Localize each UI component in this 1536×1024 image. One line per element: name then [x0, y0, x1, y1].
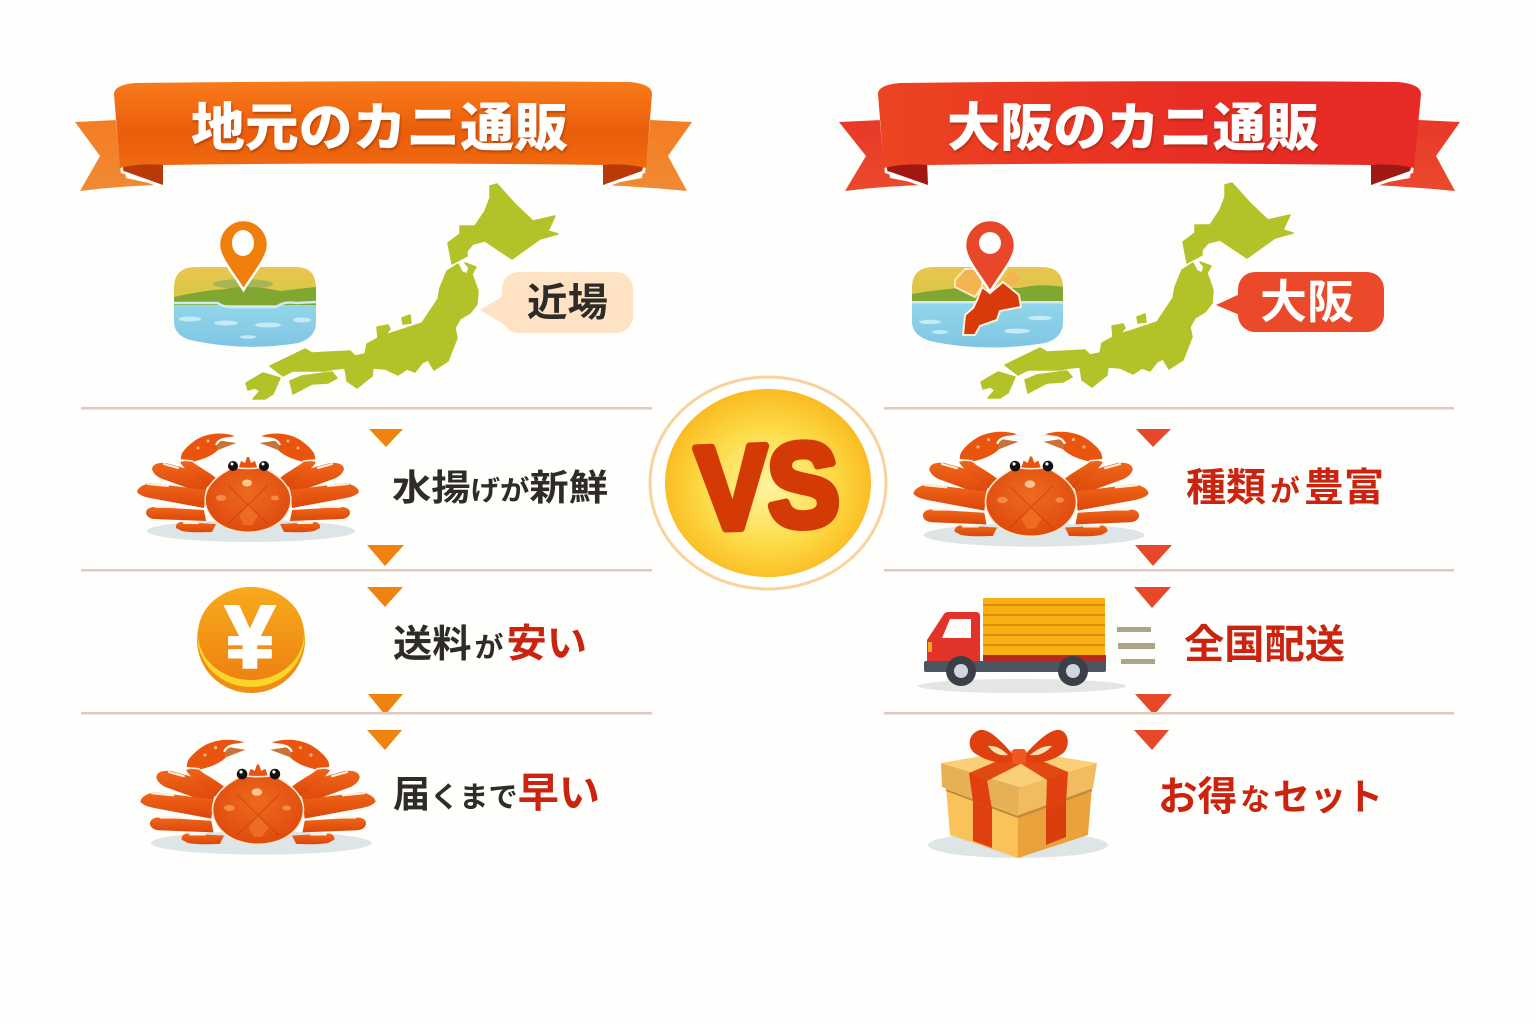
map of Japan: [246, 184, 558, 399]
arrow: [369, 429, 403, 447]
banner title: 大阪のカニ通販: [947, 100, 1319, 158]
callout: 大阪: 大阪: [1260, 276, 1354, 328]
banner title: 地元のカニ通販: [191, 100, 568, 158]
arrow: [1136, 429, 1171, 447]
map of Japan: [981, 183, 1293, 398]
text: お得なセット: お得なセット: [1158, 775, 1383, 819]
VS badge: [650, 377, 886, 589]
icon: yen coin: [197, 587, 305, 693]
icon: crab: [913, 432, 1149, 547]
arrow: [1135, 545, 1172, 566]
banner: 地元のカニ通販: [75, 81, 692, 191]
arrow: [1135, 694, 1172, 715]
icon: Osaka map with pin: [912, 221, 1063, 348]
text: 送料が安い: 送料が安い: [393, 623, 587, 666]
panel: local crab mail order: [75, 81, 692, 855]
icon: crab: [140, 740, 376, 855]
icon: gift box: [928, 730, 1108, 858]
VS badge: VS: [694, 419, 841, 555]
panel: Osaka crab mail order: [839, 81, 1460, 858]
icon: coastline map with pin: [174, 221, 316, 347]
text: 届くまで早い: 届くまで早い: [393, 770, 600, 816]
callout: 近場: 近場: [527, 282, 608, 325]
text: 全国配送: 全国配送: [1184, 623, 1345, 667]
arrow: [1134, 587, 1171, 608]
arrow: [1134, 730, 1169, 750]
callout: 近場: [480, 272, 633, 333]
arrow: [367, 730, 402, 750]
text: 水揚げが新鮮: 水揚げが新鮮: [392, 467, 608, 508]
arrow: [367, 587, 403, 607]
callout: 大阪: [1216, 272, 1384, 332]
arrow: [367, 545, 404, 566]
dividers: [81, 407, 1454, 714]
icon: yen coin: ¥: [226, 587, 275, 686]
banner: 大阪のカニ通販: [839, 81, 1460, 191]
icon: crab: [137, 434, 359, 542]
icon: delivery truck: [918, 598, 1155, 693]
arrow: [368, 694, 403, 715]
text: 種類が豊富: 種類が豊富: [1186, 467, 1384, 510]
